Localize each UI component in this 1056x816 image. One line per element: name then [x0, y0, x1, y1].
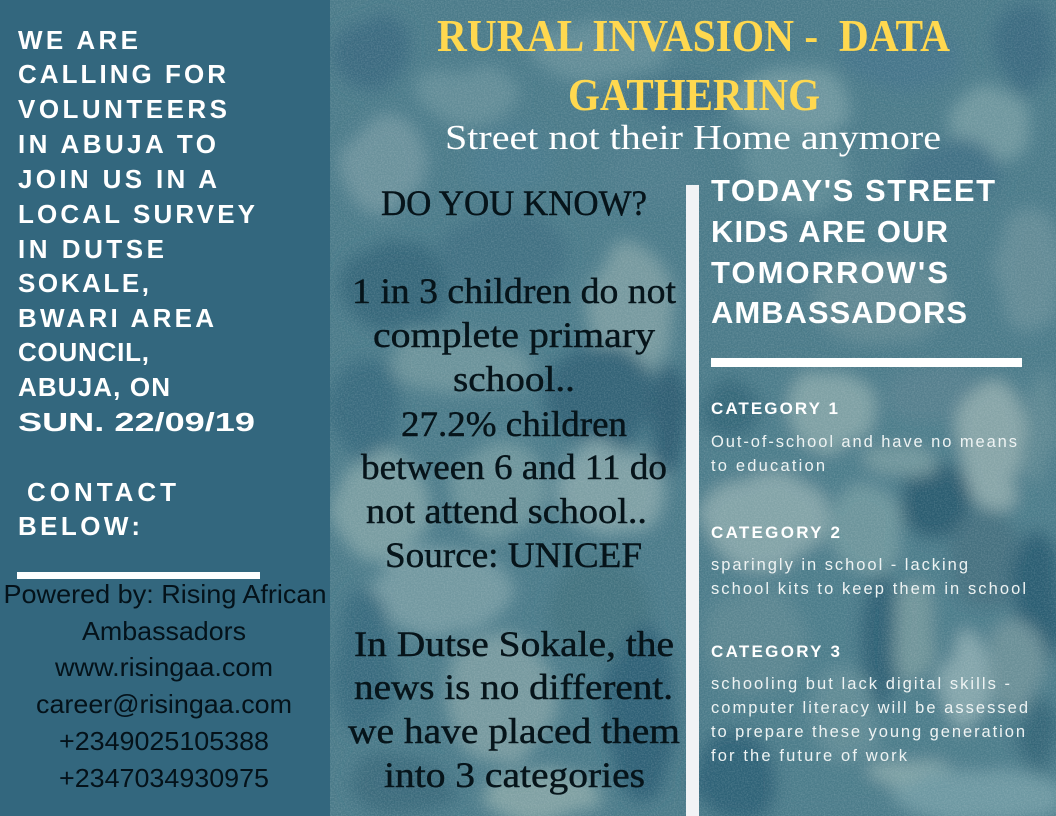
category 1: Out-of-school and have no means	[711, 433, 1017, 451]
text block: volunteer call: SUN. 22/09/19	[18, 407, 255, 437]
text block: volunteer call: LOCAL SURVEY	[18, 199, 255, 229]
text block: do you know statistics	[348, 183, 680, 795]
text block: do you know statistics: 27.2% children	[401, 404, 627, 444]
category 3: computer literacy will be assessed	[711, 699, 1028, 717]
text block: do you know statistics: between 6 and 11 do	[361, 447, 667, 487]
category 2: CATEGORY 2	[711, 523, 840, 542]
text block: volunteer call: WE ARE	[18, 25, 138, 55]
heading: today's street kids: AMBASSADORS	[711, 295, 967, 330]
text block: powered by and contact details: +2349025105388	[59, 726, 269, 756]
category 2	[711, 523, 1026, 598]
subtitle: Street not their Home anymore	[445, 118, 941, 157]
title	[437, 10, 950, 120]
background photo: crowd of children, teal tint	[330, 0, 1056, 816]
category 1	[711, 399, 1017, 475]
text block: powered by and contact details	[4, 579, 326, 793]
category 3: for the future of work	[711, 747, 908, 765]
heading: today's street kids: KIDS ARE OUR	[711, 214, 948, 249]
category 1: to education	[711, 457, 825, 475]
category 3	[711, 642, 1028, 765]
text block: volunteer call: IN DUTSE	[18, 234, 164, 264]
text block: powered by and contact details: +2347034930975	[59, 763, 269, 793]
text block: volunteer call: SOKALE,	[18, 268, 149, 298]
text block: do you know statistics: 1 in 3 children do not	[352, 271, 676, 311]
category 3: to prepare these young generation	[711, 723, 1025, 741]
text block: do you know statistics: Source: UNICEF	[385, 535, 642, 575]
text block: volunteer call: COUNCIL,	[18, 337, 149, 367]
title: GATHERING	[568, 69, 820, 120]
text block: volunteer call: IN ABUJA TO	[18, 129, 216, 159]
category 3: schooling but lack digital skills -	[711, 675, 1010, 693]
text block: do you know statistics: we have placed them	[348, 711, 680, 751]
title: RURAL INVASION - DATA	[437, 10, 950, 61]
heading: today's street kids: TOMORROW'S	[711, 255, 948, 290]
text block: contact below: CONTACT	[27, 477, 176, 507]
text block: powered by and contact details: Ambassadors	[82, 616, 246, 646]
heading: today's street kids	[711, 173, 995, 330]
text block: do you know statistics: school..	[453, 359, 575, 399]
category 3: CATEGORY 3	[711, 642, 840, 661]
heading: today's street kids: TODAY'S STREET	[711, 173, 995, 208]
text block: do you know statistics: complete primary	[373, 315, 655, 355]
text block: volunteer call: VOLUNTEERS	[18, 94, 227, 124]
text block: do you know statistics: into 3 categories	[384, 755, 645, 795]
text block: do you know statistics: DO YOU KNOW?	[381, 183, 647, 223]
text block: contact below: BELOW:	[18, 511, 140, 541]
text block: do you know statistics: news is no different.	[354, 667, 673, 707]
category 2: sparingly in school - lacking	[711, 556, 968, 574]
category 1: CATEGORY 1	[711, 399, 838, 418]
text block: volunteer call: JOIN US IN A	[18, 164, 217, 194]
text block: volunteer call: BWARI AREA	[18, 303, 214, 333]
text block: volunteer call	[18, 25, 255, 437]
text block: powered by and contact details: career@risingaa.com	[36, 689, 292, 719]
text block: powered by and contact details: www.risingaa.com	[54, 652, 273, 682]
text block: volunteer call: ABUJA, ON	[18, 372, 170, 402]
text block: do you know statistics: not attend school..	[366, 491, 647, 531]
panel: ambassadors and categories	[711, 173, 1028, 765]
text block: contact below	[18, 477, 176, 541]
panel: call for volunteers	[0, 0, 330, 816]
category 2: school kits to keep them in school	[711, 580, 1026, 598]
text block: powered by and contact details: Powered by: Rising African	[4, 579, 326, 609]
text block: do you know statistics: In Dutse Sokale, the	[354, 624, 674, 664]
text block: volunteer call: CALLING FOR	[18, 59, 226, 89]
